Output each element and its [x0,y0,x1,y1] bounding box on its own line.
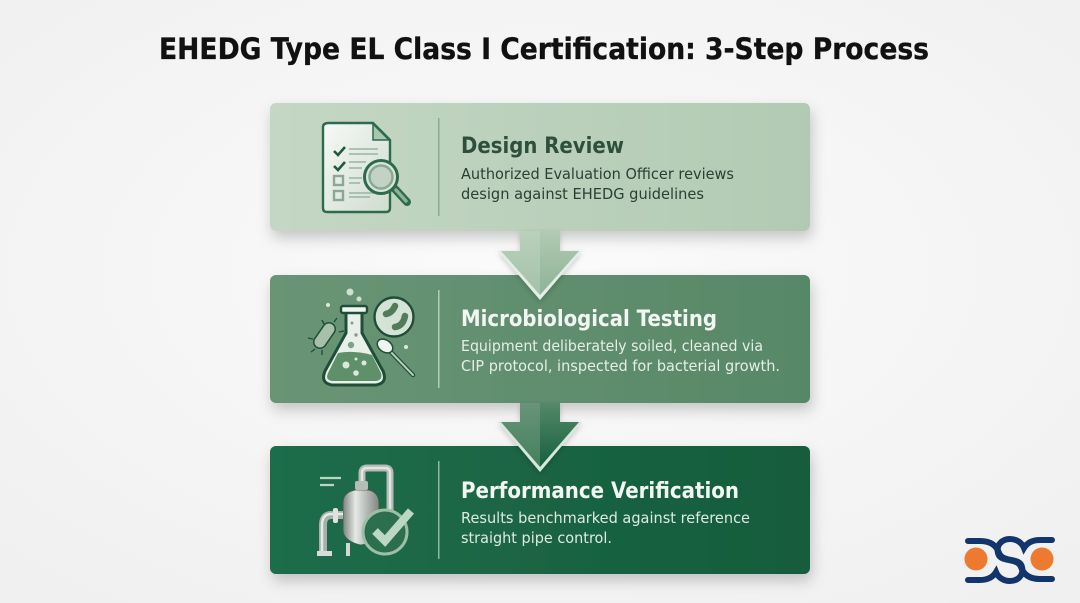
divider [438,290,440,388]
panel: performance verification [270,446,810,574]
heading: performance verification: Performance Verification [461,479,739,504]
description: design review: design against EHEDG guidelines [461,185,704,203]
description: performance verification: straight pipe control. [461,529,612,547]
description: microbiological testing: CIP protocol, inspected for bacterial growth. [461,357,780,375]
icon: flask and bacteria [308,288,414,385]
arrow: step 1 to 2 [498,231,582,300]
icon: document with magnifier [323,123,407,212]
description: design review: Authorized Evaluation Officer reviews [461,165,734,183]
divider [438,461,440,559]
logo: DSC [964,539,1054,581]
title: EHEDG Type EL Class I Certification: 3-Step Process [159,32,929,66]
panel: microbiological testing [270,275,810,403]
panel: design review [270,103,810,231]
icon: pipe vessel with check [317,468,411,556]
description: microbiological testing: Equipment deliberately soiled, cleaned via [461,337,763,355]
heading: microbiological testing: Microbiological Testing [461,307,717,332]
heading: design review: Design Review [461,134,624,159]
arrow: step 2 to 3 [498,403,582,472]
divider [438,118,440,216]
description: performance verification: Results benchmarked against reference [461,509,750,527]
